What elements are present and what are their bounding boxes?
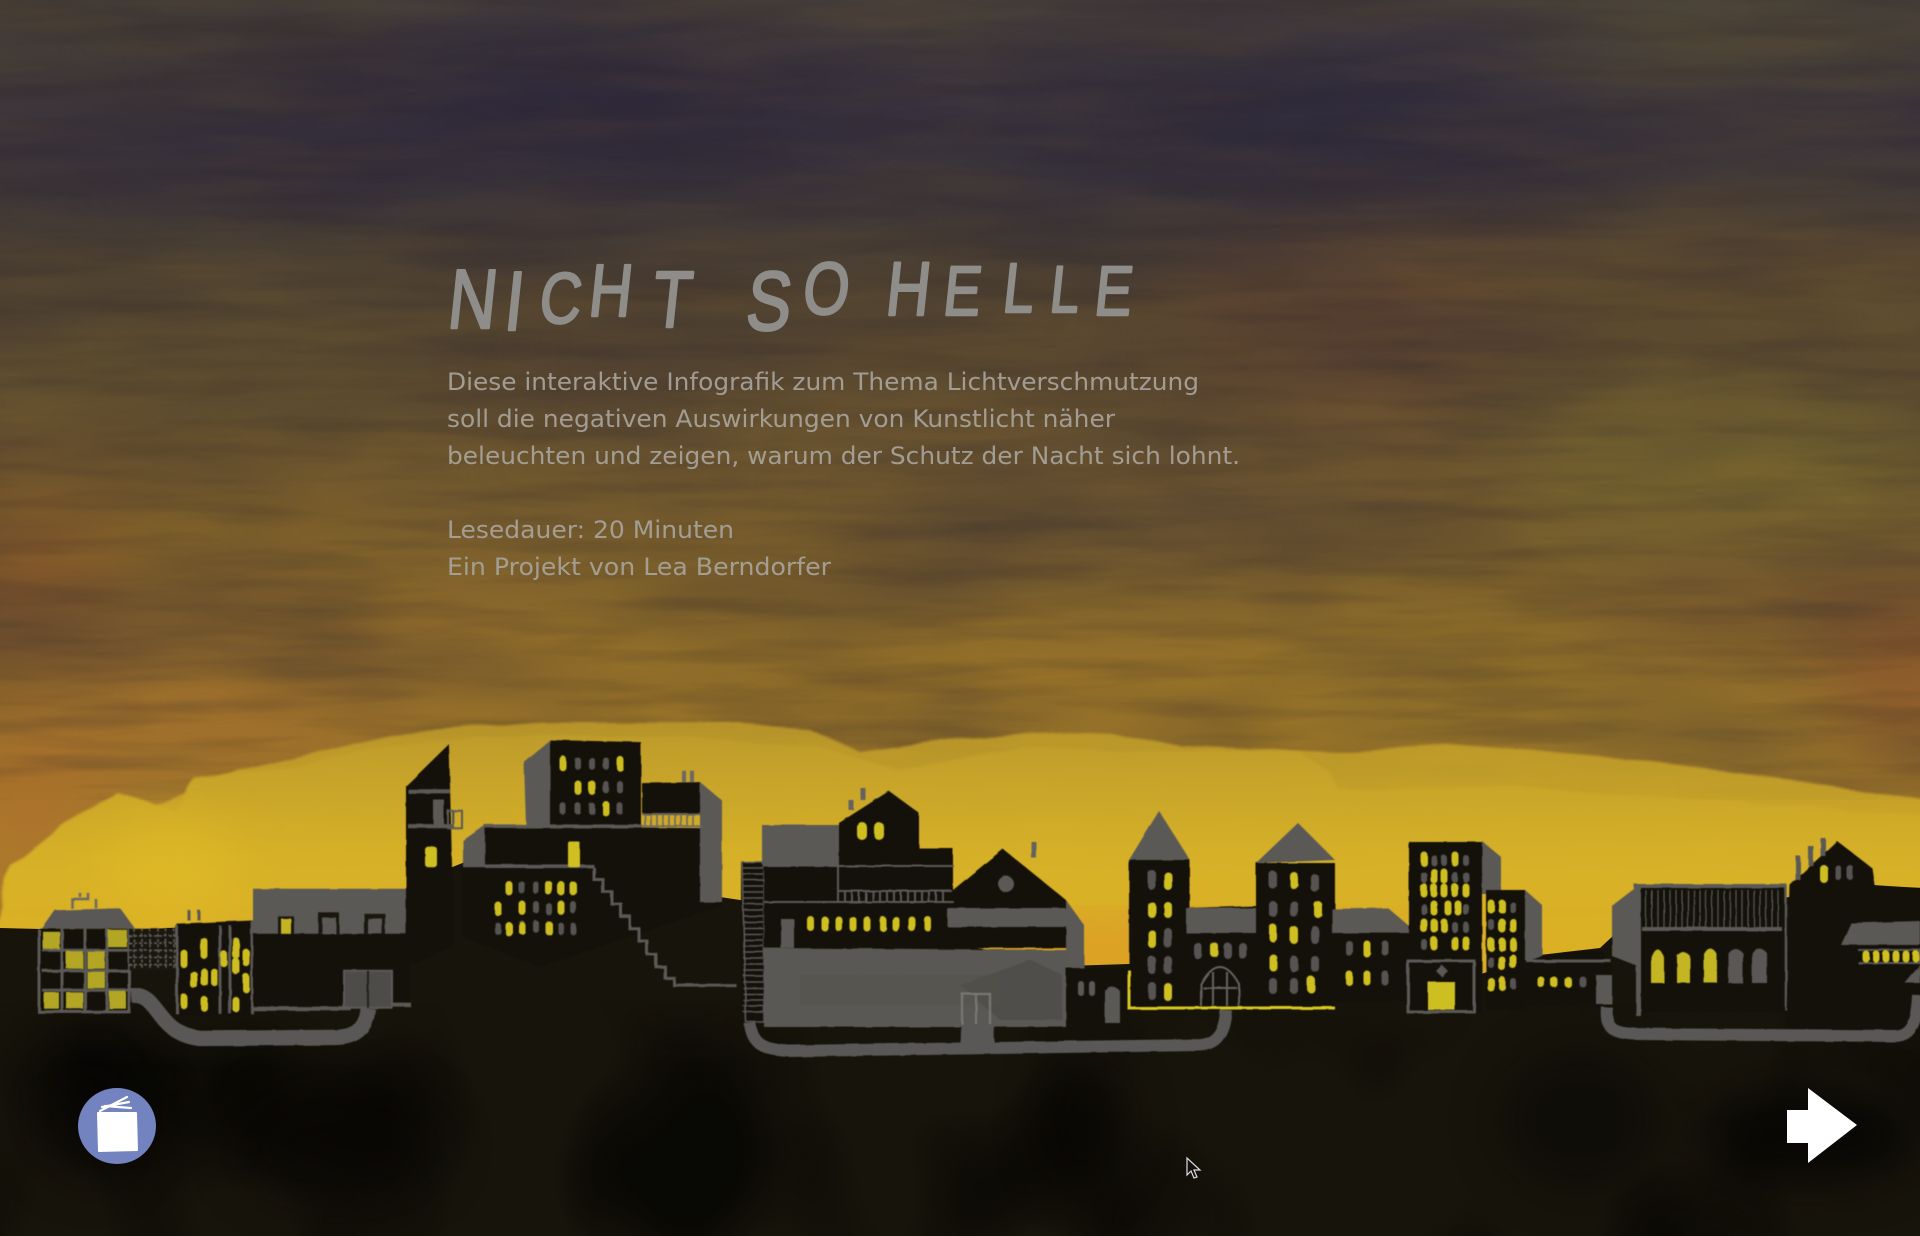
title: H (882, 246, 935, 332)
intro text: Diese interaktive Infografik zum Thema Lichtverschmutzung (447, 368, 1199, 396)
title: N (444, 253, 502, 347)
pipe right (1607, 995, 1918, 1036)
title: H (585, 250, 637, 333)
title: E (1091, 252, 1137, 330)
icon: mouse cursor (1187, 1158, 1200, 1178)
building: striped block (177, 910, 252, 1015)
sunset glow outer band (157, 720, 1920, 816)
pipe centre (750, 1010, 1226, 1051)
title: I (501, 255, 529, 349)
icon: book button (78, 1088, 156, 1164)
right hill house (1786, 838, 1920, 1030)
small roofed block (1332, 908, 1409, 1001)
title: S (742, 255, 797, 349)
intro text: beleuchten und zeigen, warum der Schutz der Nacht sich lohnt. (447, 442, 1240, 470)
tall block (1408, 841, 1501, 1012)
title: C (536, 258, 586, 338)
title: T (648, 255, 697, 345)
sunset glow inner layer (0, 751, 1560, 928)
central stair tower (741, 862, 764, 1024)
intro text: Ein Projekt von Lea Berndorfer (447, 553, 831, 581)
pipe left (131, 995, 368, 1038)
building: gray flat roof (253, 889, 411, 1009)
central hall building (762, 788, 1084, 1027)
city skyline (39, 740, 1920, 1051)
mesh wall (129, 929, 179, 970)
left quarter buildings (39, 740, 736, 1038)
title: L (1047, 253, 1084, 326)
building: checkered block (39, 893, 135, 1012)
intro text: soll die negativen Auswirkungen von Kunstlicht näher (447, 405, 1115, 433)
title: E (940, 252, 986, 330)
low row building (1526, 950, 1612, 1005)
main hilltop building (462, 740, 736, 985)
low annex (1066, 968, 1129, 1028)
right arcade building (1612, 886, 1787, 1016)
title: L (1000, 249, 1039, 327)
intro text (447, 368, 1240, 581)
stairs (594, 867, 736, 985)
slanted tower (406, 744, 462, 967)
intro text: Lesedauer: 20 Minuten (447, 516, 734, 544)
dark hillside ground (0, 860, 1920, 1236)
icon: next arrow (1787, 1088, 1857, 1163)
side block (1486, 890, 1542, 1010)
title: O (799, 248, 854, 331)
twin towers castle (1129, 811, 1335, 1008)
